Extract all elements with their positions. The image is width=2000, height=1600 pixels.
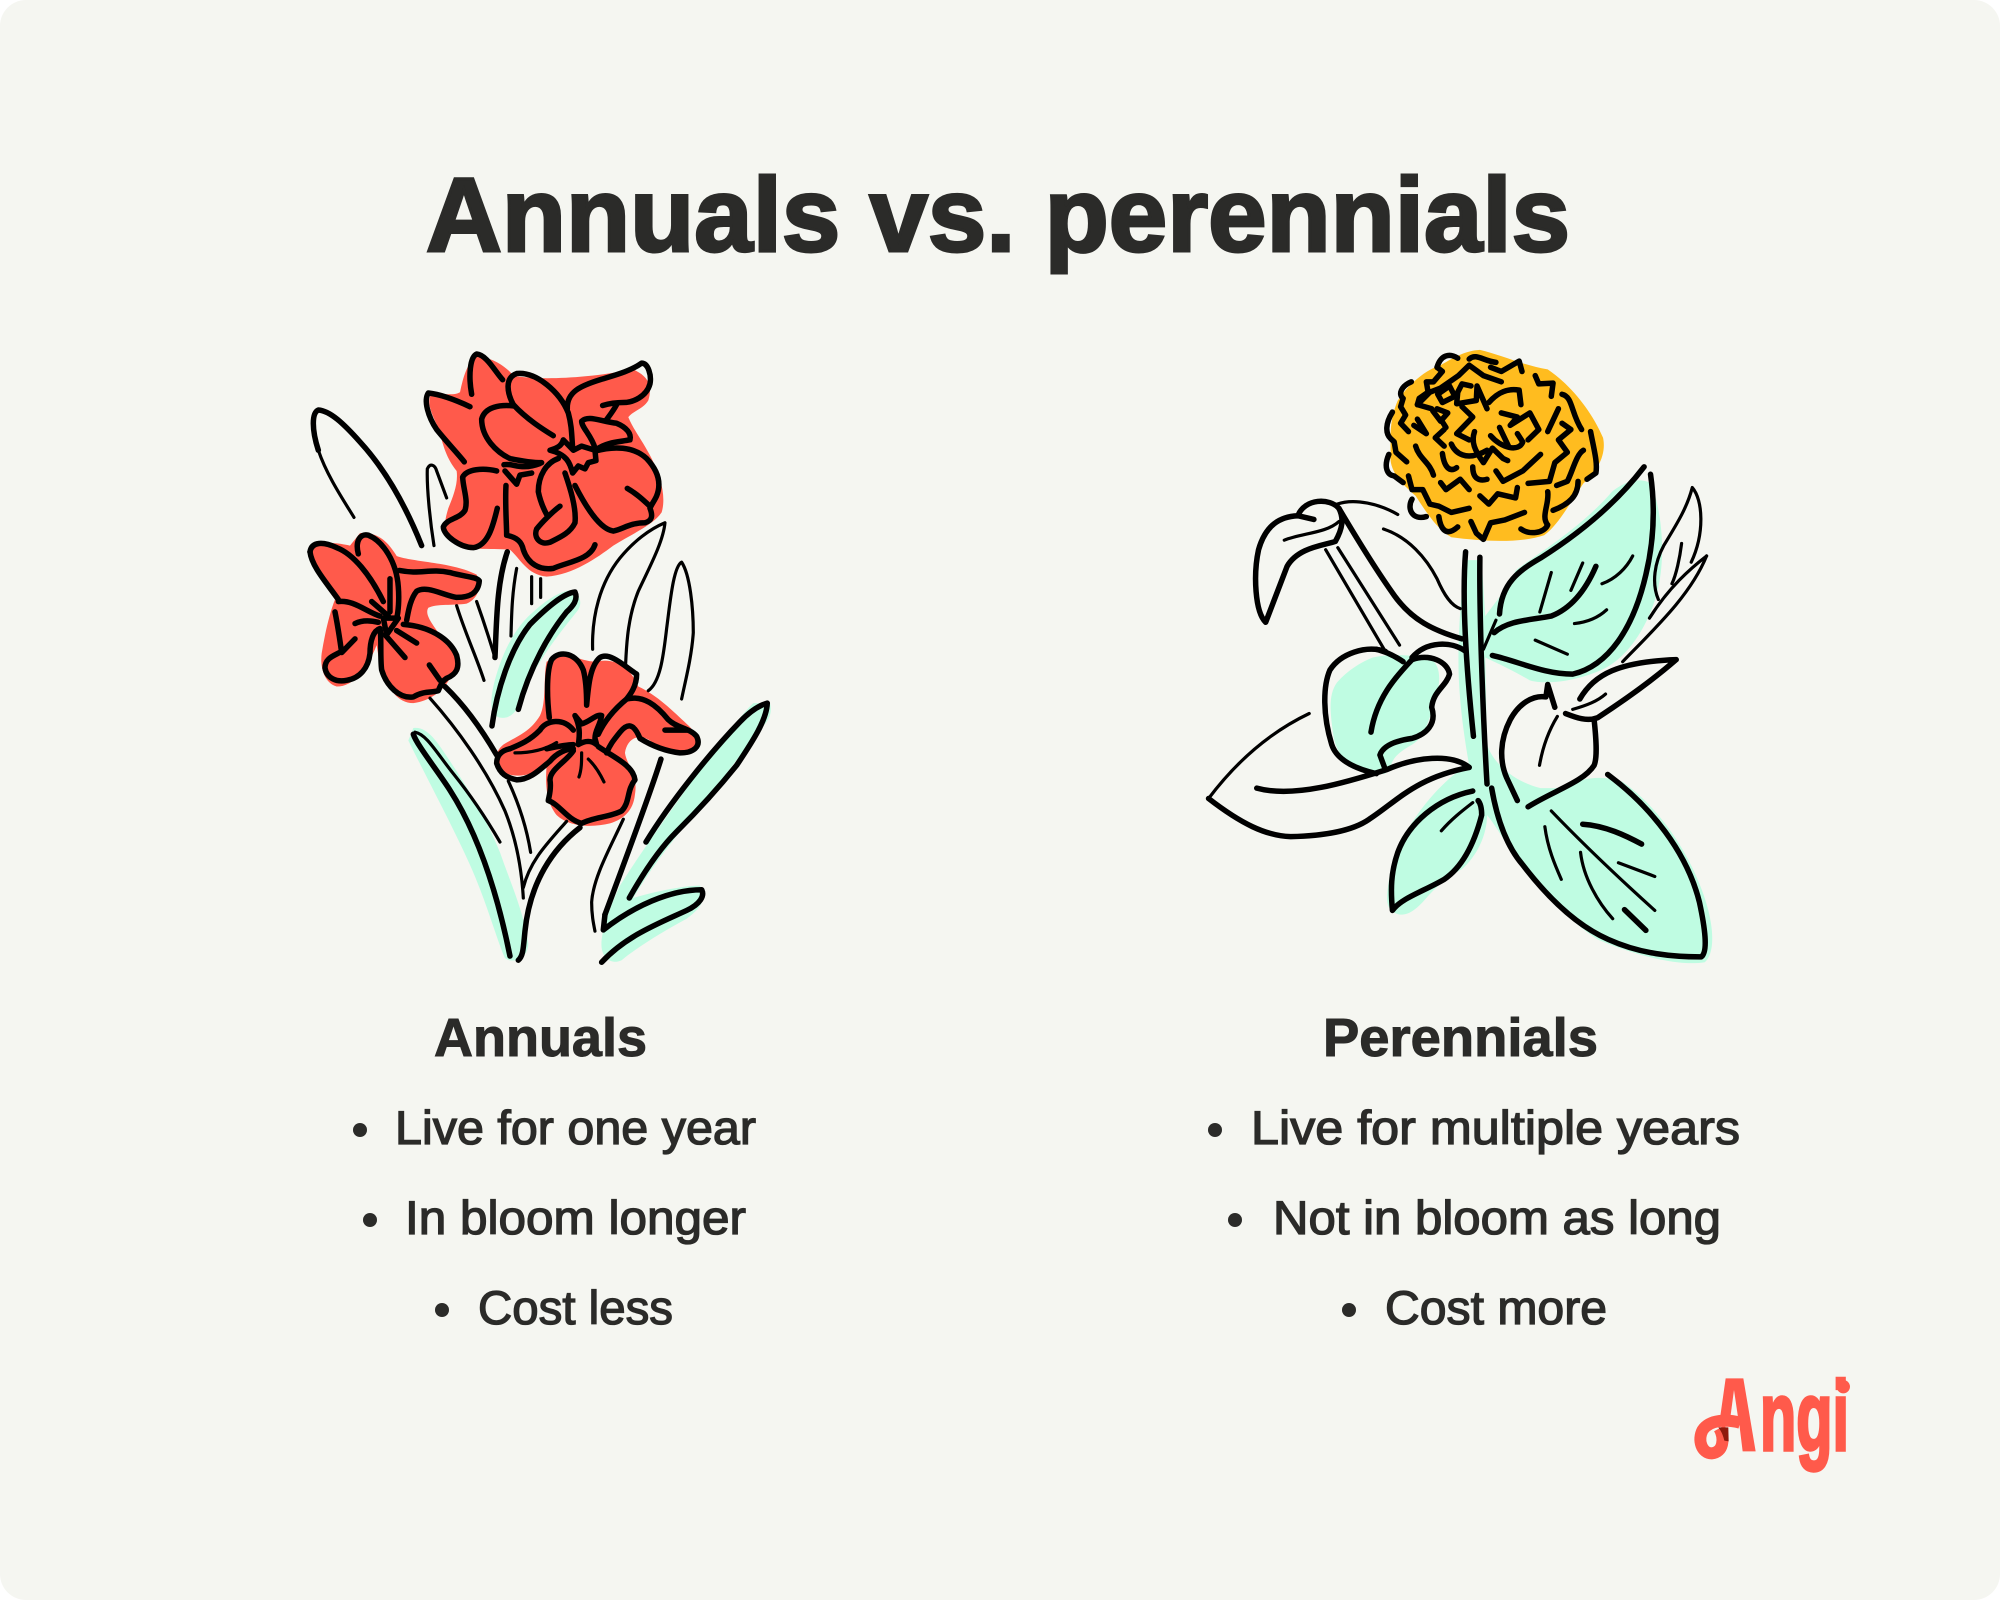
thin leaf veins	[1209, 488, 1707, 919]
heading: perennials: Perennials	[1323, 1008, 1598, 1068]
illustration: perennial yellow flower	[1209, 350, 1712, 963]
flower petal marks	[1386, 355, 1596, 539]
list item: cost more: Cost more	[1385, 1281, 1607, 1334]
illustration: annual red flowers	[310, 354, 771, 962]
list item: cost less: Cost less	[478, 1281, 673, 1334]
title: Annuals vs. perennials	[426, 157, 1570, 274]
list item: live for multiple years: Live for multiple years	[1251, 1101, 1740, 1154]
column: perennials	[1208, 1008, 1740, 1334]
stems and thin leaf strokes	[318, 450, 693, 931]
column: annuals	[353, 1008, 756, 1334]
mint leaf blobs	[1331, 480, 1712, 963]
logo: Angi	[1700, 1361, 1850, 1471]
list item: not in bloom as long: Not in bloom as long	[1273, 1191, 1721, 1244]
red colour blobs	[311, 357, 697, 826]
heading: annuals: Annuals	[434, 1008, 647, 1068]
yellow flower head blob	[1390, 350, 1604, 541]
logo: Angi: A	[1732, 1385, 1746, 1429]
list item: in bloom longer: In bloom longer	[405, 1191, 746, 1244]
mint leaf blobs	[408, 590, 771, 962]
logo: Angi: ngi	[1760, 1361, 1849, 1471]
leaf and stem outlines	[1209, 467, 1705, 957]
list item: live for one year: Live for one year	[395, 1101, 756, 1154]
flower outlines	[310, 354, 767, 962]
